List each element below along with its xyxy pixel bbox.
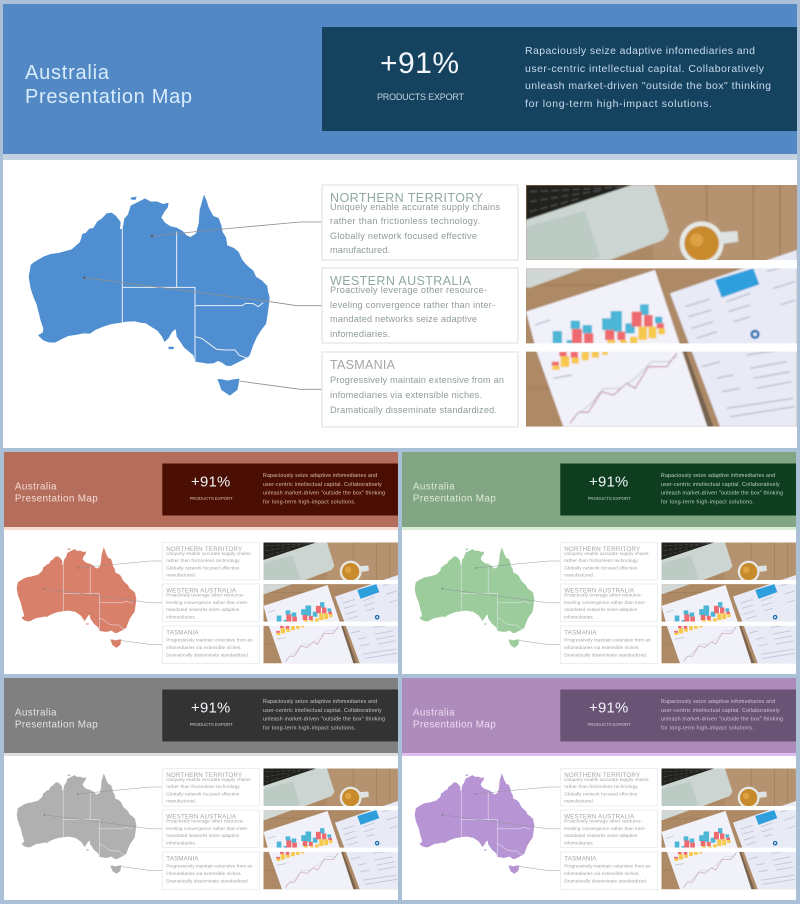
map: Australia (29, 195, 322, 396)
card: Western Australia (560, 584, 658, 622)
card: Western Australia: WESTERN AUSTRALIA (564, 587, 635, 595)
title (413, 707, 496, 731)
stat label: PRODUCTS EXPORT (588, 722, 631, 727)
card: Tasmania: TASMANIA (564, 629, 597, 637)
map: Australia (415, 773, 560, 874)
card: Western Australia: WESTERN AUSTRALIA (166, 587, 237, 595)
card: Northern Territory: NORTHERN TERRITORY (330, 191, 484, 205)
panel: main blue slide (3, 4, 800, 448)
card: Western Australia: Proactively leverage other resource- (166, 592, 245, 598)
card: Western Australia (560, 810, 658, 848)
card: Western Australia (162, 810, 260, 848)
stat panel (162, 464, 398, 516)
stat panel (162, 690, 398, 742)
card: Northern Territory (162, 542, 260, 580)
header description: for long-term high-impact solutions. (525, 98, 712, 110)
band underline (402, 753, 796, 756)
title (15, 707, 98, 731)
card: Tasmania (162, 626, 260, 664)
header description: unleash market-driven "outside the box" thinking (661, 490, 783, 497)
header band (3, 4, 797, 154)
photo strip (261, 538, 399, 667)
header description (661, 473, 783, 506)
card: Western Australia (322, 268, 518, 343)
header band (402, 452, 796, 527)
panel: green slide (402, 452, 797, 674)
card: Western Australia: leveling convergence rather than inter- (166, 600, 249, 605)
card: Northern Territory: rather than frictionless technology. (166, 558, 241, 563)
card: Northern Territory (162, 768, 260, 806)
header description: Rapaciously seize adaptive infomediaries and (661, 699, 775, 705)
card: Northern Territory: rather than frictionless technology. (330, 216, 480, 226)
header description (525, 45, 771, 110)
body panel (3, 160, 797, 448)
card: Tasmania: infomediaries via extensible niches. (166, 871, 242, 876)
card: Tasmania: Progressively maintain extensive from an (564, 863, 651, 869)
card: Northern Territory: Globally network focused effective (564, 565, 638, 571)
card: Northern Territory: rather than frictionless technology. (564, 784, 639, 789)
band underline (3, 154, 797, 160)
header description: unleash market-driven "outside the box" thinking (525, 80, 771, 92)
card: Northern Territory (560, 768, 658, 806)
card: Western Australia: WESTERN AUSTRALIA (330, 274, 472, 288)
card: Northern Territory: Globally network focused effective (330, 231, 477, 241)
photo strip (261, 764, 399, 893)
header description: for long-term high-impact solutions. (661, 499, 754, 506)
card: Tasmania (560, 626, 658, 664)
title: Presentation Map (25, 86, 192, 108)
stat panel (322, 27, 797, 131)
header band (4, 452, 398, 527)
card: Western Australia: infomediaries. (564, 840, 594, 846)
title: Presentation Map (413, 719, 496, 731)
card: Tasmania: infomediaries via extensible niches. (564, 871, 640, 876)
title (15, 481, 98, 505)
panel: red slide (4, 452, 399, 674)
card: Western Australia: leveling convergence rather than inter- (564, 826, 647, 831)
header description (661, 699, 783, 732)
stat value: +91% (380, 47, 459, 80)
header description: Rapaciously seize adaptive infomediaries and (525, 45, 755, 57)
card: Western Australia: Proactively leverage other resource- (330, 285, 487, 295)
stat label: PRODUCTS EXPORT (588, 496, 631, 501)
card: Northern Territory (322, 185, 518, 260)
title: Presentation Map (15, 493, 98, 505)
card: Western Australia: mandated networks seize adaptive (330, 314, 477, 324)
card: Western Australia: leveling convergence rather than inter- (330, 300, 495, 310)
card: Northern Territory (560, 542, 658, 580)
panel: grey slide (4, 678, 399, 900)
stat value: +91% (191, 473, 230, 491)
card: Western Australia: leveling convergence rather than inter- (564, 600, 647, 605)
stat label: PRODUCTS EXPORT (377, 92, 464, 102)
card: Northern Territory: NORTHERN TERRITORY (564, 546, 641, 553)
card: Northern Territory: Uniquely enable accurate supply chains (564, 777, 649, 782)
card: Tasmania: TASMANIA (330, 358, 396, 372)
stat value: +91% (191, 699, 230, 717)
body panel (4, 756, 398, 900)
card: Tasmania: Dramatically disseminate standardized. (166, 652, 249, 658)
header description: user-centric intellectual capital. Collaboratively (661, 708, 780, 714)
card: Tasmania (560, 852, 658, 890)
card: Tasmania: Dramatically disseminate standardized. (330, 405, 497, 415)
map: Australia (17, 773, 162, 874)
body panel (402, 530, 796, 674)
card: Western Australia: leveling convergence rather than inter- (166, 826, 249, 831)
stat panel (560, 690, 796, 742)
card: Northern Territory: Globally network focused effective (166, 791, 240, 797)
band underline (402, 527, 796, 530)
title: Presentation Map (413, 493, 496, 505)
card: Western Australia: infomediaries. (330, 329, 390, 339)
stat value: +91% (589, 473, 628, 491)
stat panel (560, 464, 796, 516)
map: Australia (415, 547, 560, 648)
card: Northern Territory: Uniquely enable accurate supply chains (166, 551, 251, 556)
card: Northern Territory: Uniquely enable accurate supply chains (564, 551, 649, 556)
header description: user-centric intellectual capital. Collaboratively (263, 482, 382, 488)
header band (402, 678, 796, 753)
card: Northern Territory: manufactured. (564, 572, 594, 578)
header description: user-centric intellectual capital. Collaboratively (661, 482, 780, 488)
header description: for long-term high-impact solutions. (661, 725, 754, 732)
card: Tasmania: Progressively maintain extensive from an (330, 375, 504, 385)
header description (263, 699, 385, 732)
title: Australia (413, 707, 455, 719)
body panel (4, 530, 398, 674)
stat value: +91% (589, 699, 628, 717)
header description (263, 473, 385, 506)
title: Australia (15, 481, 57, 493)
card: Western Australia: Proactively leverage other resource- (564, 592, 643, 598)
header description: unleash market-driven "outside the box" thinking (661, 716, 783, 723)
card: Northern Territory: manufactured. (330, 245, 390, 255)
panel: purple slide (402, 678, 797, 900)
header description: for long-term high-impact solutions. (263, 725, 356, 732)
header description: for long-term high-impact solutions. (263, 499, 356, 506)
card: Northern Territory: NORTHERN TERRITORY (166, 772, 243, 779)
card: Tasmania: Dramatically disseminate standardized. (166, 878, 249, 884)
band underline (4, 753, 398, 756)
card: Northern Territory: manufactured. (564, 798, 594, 804)
card: Northern Territory: rather than frictionless technology. (564, 558, 639, 563)
header description: user-centric intellectual capital. Collaboratively (263, 708, 382, 714)
card: Western Australia: infomediaries. (166, 840, 196, 846)
card: Tasmania: infomediaries via extensible niches. (564, 645, 640, 650)
photo strip (659, 764, 797, 893)
stat label: PRODUCTS EXPORT (190, 722, 233, 727)
stat label: PRODUCTS EXPORT (190, 496, 233, 501)
card: Western Australia: infomediaries. (564, 614, 594, 620)
body panel (402, 756, 796, 900)
card: Northern Territory: Globally network focused effective (166, 565, 240, 571)
card: Western Australia: mandated networks seize adaptive (564, 607, 638, 612)
card: Tasmania: Dramatically disseminate standardized. (564, 878, 647, 884)
card: Tasmania: TASMANIA (166, 855, 199, 863)
header description: Rapaciously seize adaptive infomediaries and (661, 473, 775, 479)
map: Australia (17, 547, 162, 648)
photo strip (659, 538, 797, 667)
card: Western Australia: mandated networks seize adaptive (166, 833, 240, 838)
card: Northern Territory: NORTHERN TERRITORY (166, 546, 243, 553)
header description: unleash market-driven "outside the box" thinking (263, 490, 385, 497)
card: Western Australia: mandated networks seize adaptive (166, 607, 240, 612)
card: Western Australia: infomediaries. (166, 614, 196, 620)
card: Western Australia: WESTERN AUSTRALIA (564, 813, 635, 821)
title: Presentation Map (15, 719, 98, 731)
title (25, 62, 192, 108)
title: Australia (25, 62, 110, 84)
header description: user-centric intellectual capital. Collaboratively (525, 63, 765, 75)
header description: Rapaciously seize adaptive infomediaries and (263, 699, 377, 705)
title: Australia (15, 707, 57, 719)
photo strip (520, 175, 800, 435)
card: Northern Territory: manufactured. (166, 572, 196, 578)
card: Tasmania: TASMANIA (564, 855, 597, 863)
band underline (4, 527, 398, 530)
card: Northern Territory: manufactured. (166, 798, 196, 804)
card: Tasmania (162, 852, 260, 890)
card: Western Australia (162, 584, 260, 622)
card: Northern Territory: rather than frictionless technology. (166, 784, 241, 789)
card: Western Australia: mandated networks seize adaptive (564, 833, 638, 838)
card: Tasmania: TASMANIA (166, 629, 199, 637)
card: Northern Territory: Uniquely enable accurate supply chains (330, 202, 500, 212)
card: Western Australia: Proactively leverage other resource- (166, 818, 245, 824)
card: Tasmania: infomediaries via extensible niches. (330, 390, 482, 400)
header description: unleash market-driven "outside the box" thinking (263, 716, 385, 723)
card: Tasmania: Progressively maintain extensive from an (564, 637, 651, 643)
card: Tasmania: Progressively maintain extensive from an (166, 863, 253, 869)
title: Australia (413, 481, 455, 493)
card: Northern Territory: Globally network focused effective (564, 791, 638, 797)
card: Tasmania: Progressively maintain extensive from an (166, 637, 253, 643)
header description: Rapaciously seize adaptive infomediaries and (263, 473, 377, 479)
card: Western Australia: Proactively leverage other resource- (564, 818, 643, 824)
card: Tasmania (322, 352, 518, 427)
title (413, 481, 496, 505)
header band (4, 678, 398, 753)
card: Northern Territory: NORTHERN TERRITORY (564, 772, 641, 779)
card: Tasmania: Dramatically disseminate standardized. (564, 652, 647, 658)
card: Western Australia: WESTERN AUSTRALIA (166, 813, 237, 821)
card: Northern Territory: Uniquely enable accurate supply chains (166, 777, 251, 782)
card: Tasmania: infomediaries via extensible niches. (166, 645, 242, 650)
